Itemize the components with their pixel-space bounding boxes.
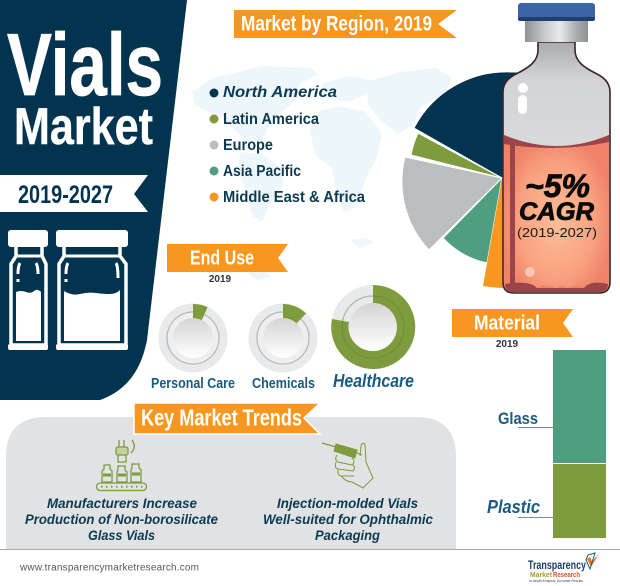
year ribbon: 2019-2027 [18, 181, 113, 209]
heading ribbon: material [452, 309, 573, 337]
label: glass: Glass [498, 409, 538, 428]
legend item: Latin America: Latin America [223, 111, 319, 128]
icon: vial production line [96, 440, 146, 490]
bottle liquid [504, 135, 609, 292]
title: Vials: Vials [7, 15, 163, 114]
heading ribbon: market by region: Market by Region, 2019 [241, 12, 432, 36]
legend item: North America: North America [223, 84, 337, 101]
logo: Transparency Market Research: Transparency [528, 560, 586, 572]
bottle body [503, 42, 610, 293]
title panel [0, 0, 187, 400]
year ribbon [0, 175, 148, 212]
label: healthcare: Healthcare [333, 371, 414, 391]
donut: chemicals [248, 304, 318, 372]
label: personal care: Personal Care [151, 376, 235, 392]
logo: Transparency Market Research: Market [530, 570, 552, 579]
trend text: non-borosilicate: Glass Vials [88, 528, 155, 543]
bottle collar [525, 21, 588, 42]
label: plastic: Plastic [487, 497, 540, 517]
trend text: injection-molded: Packaging [315, 528, 381, 543]
heading ribbon: end use [167, 244, 288, 272]
CAGR value: ~5% [525, 168, 590, 204]
donut: personal care [158, 304, 228, 372]
trend text: injection-molded: Injection-molded Vials [277, 496, 418, 511]
pie chart: market by region [402, 72, 530, 288]
bottle cap [518, 3, 595, 21]
heading ribbon: material: Material [474, 312, 540, 334]
label: chemicals: Chemicals [252, 376, 315, 392]
title: Market: Market [14, 98, 153, 156]
panel: key market trends [0, 403, 620, 550]
legend: regions [210, 84, 365, 206]
heading ribbon: key market trends: Key Market Trends [141, 404, 302, 430]
trend text: non-borosilicate: Production of Non-borosilicate [25, 512, 218, 527]
footer url: www.transparencymarketresearch.com [19, 562, 199, 574]
logo: Transparency Market Research: In-depth Analysis. Accurate Results [529, 579, 583, 583]
icon: large vial [56, 230, 128, 350]
trend text: injection-molded: Well-suited for Ophthalmic [263, 512, 433, 527]
heading ribbon: end use: End Use [190, 248, 254, 270]
legend item: Middle East & Africa: Middle East & Africa [223, 189, 365, 206]
donut: healthcare [331, 285, 415, 369]
icon: hand with syringe [322, 443, 373, 488]
material year: 2019 [496, 339, 519, 350]
trend text: non-borosilicate [25, 496, 218, 543]
end use year: 2019 [209, 274, 232, 285]
bottle: CAGR [503, 3, 610, 293]
CAGR period: (2019-2027) [517, 225, 597, 240]
world map background [192, 66, 452, 280]
legend item: Europe: Europe [223, 137, 273, 154]
icon: small vial [8, 230, 48, 350]
stacked bar: material [553, 350, 606, 538]
CAGR label: CAGR [519, 198, 594, 226]
logo: Transparency Market Research [528, 553, 599, 583]
trend text: non-borosilicate: Manufacturers Increase [47, 496, 197, 511]
trend text: injection-molded [263, 496, 433, 543]
logo: Transparency Market Research: Research [553, 570, 580, 579]
legend item: Asia Pacific: Asia Pacific [223, 163, 301, 180]
